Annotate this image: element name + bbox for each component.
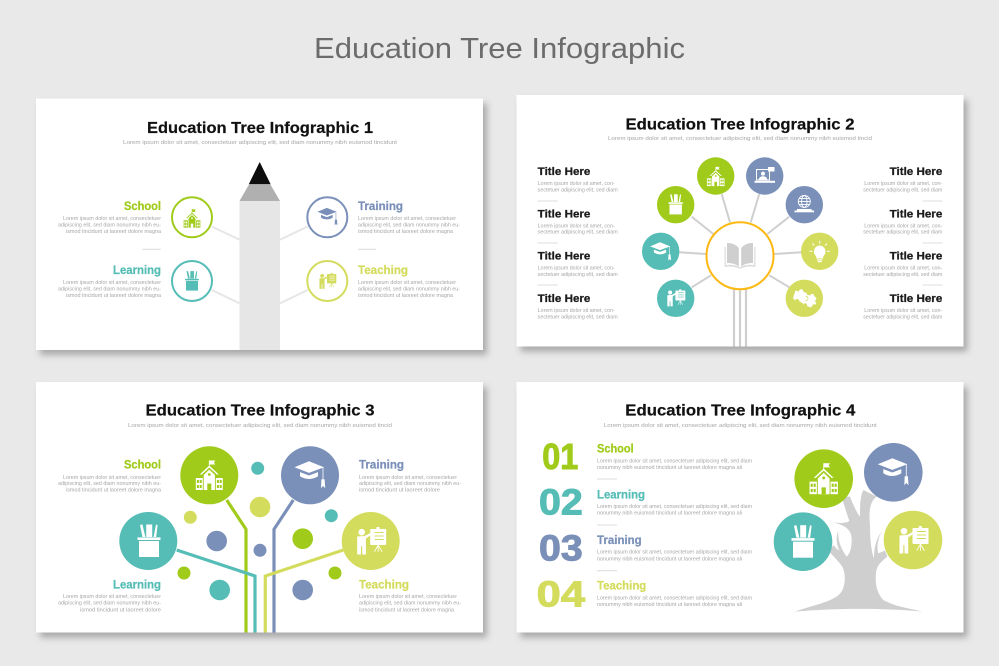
tree node: graduation cap — [864, 443, 923, 502]
item 03 Training: nonummy nibh euismod tincidunt ut laoreet dolore magna ali — [597, 556, 742, 562]
item 04 Teaching: Teaching — [597, 581, 646, 593]
big node: teacher — [342, 512, 400, 570]
icon node: light bulb — [801, 233, 838, 270]
right titles: Lorem ipsum dolor sit amet, con- — [864, 223, 943, 229]
label: School: School — [124, 201, 161, 213]
left titles — [538, 166, 618, 320]
label: School: adipiscing elit, sed diam nonummy nibh eu- — [58, 223, 161, 229]
item 04 Teaching: nonummy nibh euismod tincidunt ut laoreet dolore magna ali — [597, 602, 742, 608]
icon node: school — [697, 157, 734, 195]
label: Teaching: adipiscing elit, sed diam nonummy nibh eu- — [359, 601, 461, 607]
label: Learning: ismod tincidunt ut laoreet dolore — [80, 607, 161, 613]
item 01 School: nonummy nibh euismod tincidunt ut laoreet dolore magna ali — [597, 465, 742, 471]
item 04 Teaching: 04 — [537, 573, 585, 614]
label: School: Lorem ipsum dolor sit amet, consectetuer — [63, 475, 161, 481]
big node: pencil cup — [119, 512, 177, 570]
left titles: sectetuer adipiscing elit, sed diam — [538, 230, 618, 236]
label: School: adipiscing elit, sed diam nonummy nibh eu- — [58, 481, 161, 487]
label: Learning: Lorem ipsum dolor sit amet, consectetuer — [63, 280, 161, 286]
item 04 Teaching: Lorem ipsum dolor sit amet, consectetuer adipiscing elit, sed diam — [597, 595, 752, 601]
label: Learning: Learning — [113, 265, 161, 277]
label: Teaching — [358, 265, 460, 299]
item 03 Training — [539, 527, 752, 568]
right titles: sectetuer adipiscing elit, sed diam — [863, 187, 942, 193]
label: School: ismod tincidunt ut laoreet dolore magna — [66, 488, 161, 494]
label: Learning: Lorem ipsum dolor sit amet, consectetuer — [63, 594, 161, 600]
tree node: school — [794, 449, 853, 508]
icon node: globe — [786, 186, 823, 223]
tree silhouette — [795, 490, 923, 612]
item 03 Training: Lorem ipsum dolor sit amet, consectetuer adipiscing elit, sed diam — [597, 550, 752, 556]
label: Learning — [58, 265, 161, 299]
label: Teaching: ismod tincidunt ut laoreet dolore magna — [358, 293, 453, 299]
label: School: Lorem ipsum dolor sit amet, consectetuer — [63, 216, 161, 222]
label: Training: ismod tincidunt ut laoreet dolore — [359, 488, 440, 494]
icon: school — [172, 197, 212, 237]
item 01 School — [542, 436, 752, 477]
label: School — [58, 460, 161, 494]
item 04 Teaching — [537, 573, 752, 614]
panel 4 subtitle: Lorem ipsum dolor sit amet, consectetuer adipiscing elit, sed diam nonummy nibh euismod tincidunt — [604, 423, 877, 429]
decorative leaf dots — [178, 462, 342, 600]
label: School: ismod tincidunt ut laoreet dolore magna — [66, 229, 161, 235]
label: Teaching: Teaching — [358, 265, 408, 277]
right titles: Lorem ipsum dolor sit amet, con- — [864, 308, 943, 314]
label: Learning: ismod tincidunt ut laoreet dolore magna — [66, 293, 161, 299]
item 02 Learning: nonummy nibh euismod tincidunt ut laoreet dolore magna ali — [597, 511, 742, 517]
label: Training — [359, 460, 461, 494]
big node: school — [180, 446, 238, 504]
label: Teaching: ismod tincidunt ut laoreet dolore magna — [359, 607, 454, 613]
left titles: sectetuer adipiscing elit, sed diam — [538, 272, 618, 278]
right titles: Title Here — [890, 166, 942, 178]
label: Teaching: Teaching — [359, 579, 409, 591]
label: Training: Lorem ipsum dolor sit amet, consectetuer — [359, 475, 457, 481]
page title: Education Tree Infographic — [314, 33, 685, 65]
label: School — [58, 201, 161, 235]
item 01 School: School — [597, 443, 634, 455]
icon node: graduation cap — [642, 233, 679, 270]
panel 1 card — [36, 98, 483, 350]
left titles: Title Here — [538, 251, 590, 263]
branch connectors — [212, 226, 308, 303]
label: Training: Training — [358, 201, 403, 213]
panel 2 card — [516, 95, 964, 346]
right titles: sectetuer adipiscing elit, sed diam — [863, 272, 942, 278]
icon: teacher — [307, 261, 347, 301]
icon: pencil cup — [172, 261, 212, 301]
right titles — [863, 166, 943, 320]
icon: graduation cap — [307, 197, 347, 237]
tree node: pencil cup — [774, 512, 832, 571]
label: Learning: Learning — [113, 579, 161, 591]
label: Training: adipiscing elit, sed diam nonummy nibh eu- — [359, 481, 461, 487]
radial connectors and trunk — [679, 194, 802, 346]
label: Teaching: adipiscing elit, sed diam nonummy nibh eu- — [358, 286, 460, 292]
left titles: Lorem ipsum dolor sit amet, con- — [538, 308, 615, 314]
panel 4 card — [516, 382, 964, 632]
right titles: Title Here — [890, 208, 942, 220]
central book circle — [706, 222, 774, 289]
left titles: Title Here — [538, 293, 590, 305]
panel 2 subtitle: Lorem ipsum dolor sit amet, consectetuer adipiscing elit, sed diam nonummy nibh euismod tincid — [608, 136, 872, 142]
right titles: Lorem ipsum dolor sit amet, con- — [864, 266, 943, 272]
right titles: Title Here — [890, 251, 942, 263]
label: Learning: adipiscing elit, sed diam nonummy nibh eu- — [58, 286, 161, 292]
label: Training — [358, 201, 460, 235]
item 02 Learning: Lorem ipsum dolor sit amet, consectetuer adipiscing elit, sed diam — [597, 504, 752, 510]
label: Learning — [58, 579, 161, 613]
right titles: sectetuer adipiscing elit, sed diam — [863, 230, 942, 236]
left titles: Lorem ipsum dolor sit amet, con- — [538, 181, 615, 187]
panel: infographic 3 branching lines — [36, 382, 483, 632]
panel 1 heading: Education Tree Infographic 1 — [147, 120, 373, 137]
panel 4 heading: Education Tree Infographic 4 — [625, 403, 855, 420]
label: Teaching: Lorem ipsum dolor sit amet, consectetuer — [358, 280, 456, 286]
item 01 School: 01 — [542, 436, 578, 477]
right titles: Title Here — [890, 293, 942, 305]
left titles: Title Here — [538, 166, 590, 178]
left titles: Lorem ipsum dolor sit amet, con- — [538, 223, 615, 229]
icon node: pencil cup — [657, 186, 694, 223]
label: Teaching: Lorem ipsum dolor sit amet, consectetuer — [359, 594, 457, 600]
right titles: Lorem ipsum dolor sit amet, con- — [864, 181, 943, 187]
icon node: online class — [746, 157, 783, 195]
label: Training: adipiscing elit, sed diam nonummy nibh eu- — [358, 223, 460, 229]
panel: infographic 4 numbered tree — [516, 382, 964, 632]
icon node: puzzle — [786, 280, 823, 317]
panel 3 heading: Education Tree Infographic 3 — [146, 403, 375, 420]
panel 2 heading: Education Tree Infographic 2 — [626, 116, 855, 134]
left titles: Lorem ipsum dolor sit amet, con- — [538, 266, 615, 272]
label: Training: Training — [359, 460, 404, 472]
item 03 Training: Training — [597, 535, 642, 547]
big node: graduation cap — [281, 446, 339, 504]
left titles: sectetuer adipiscing elit, sed diam — [538, 314, 618, 320]
item 03 Training: 03 — [539, 527, 583, 568]
panel: infographic 1 pencil — [36, 98, 483, 350]
pencil trunk — [240, 162, 280, 350]
item 02 Learning: Learning — [597, 489, 645, 501]
item 01 School: Lorem ipsum dolor sit amet, consectetuer adipiscing elit, sed diam — [597, 458, 752, 464]
label: Training: Lorem ipsum dolor sit amet, consectetuer — [358, 216, 456, 222]
item 02 Learning — [539, 482, 752, 523]
left titles: sectetuer adipiscing elit, sed diam — [538, 187, 618, 193]
left titles: Title Here — [538, 208, 590, 220]
panel: infographic 2 radial tree — [516, 95, 964, 346]
label: School: School — [124, 460, 161, 472]
label: Teaching — [359, 579, 461, 613]
coloured branch lines — [177, 500, 343, 632]
panel 1 subtitle: Lorem ipsum dolor sit amet, consectetuer adipiscing elit, sed diam nonummy nibh euismod tincidunt — [123, 140, 398, 146]
icon node: presentation teacher — [657, 280, 694, 317]
item 02 Learning: 02 — [539, 482, 583, 523]
label: Training: ismod tincidunt ut laoreet dolore magna — [358, 229, 453, 235]
tree node: teacher — [884, 511, 942, 569]
panel 3 card — [36, 382, 483, 632]
right titles: sectetuer adipiscing elit, sed diam — [863, 314, 942, 320]
label: Learning: adipiscing elit, sed diam nonummy nibh eu- — [58, 601, 161, 607]
panel 3 subtitle: Lorem ipsum dolor sit amet, consectetuer adipiscing elit, sed diam nonummy nibh euismod tincid — [128, 423, 392, 429]
